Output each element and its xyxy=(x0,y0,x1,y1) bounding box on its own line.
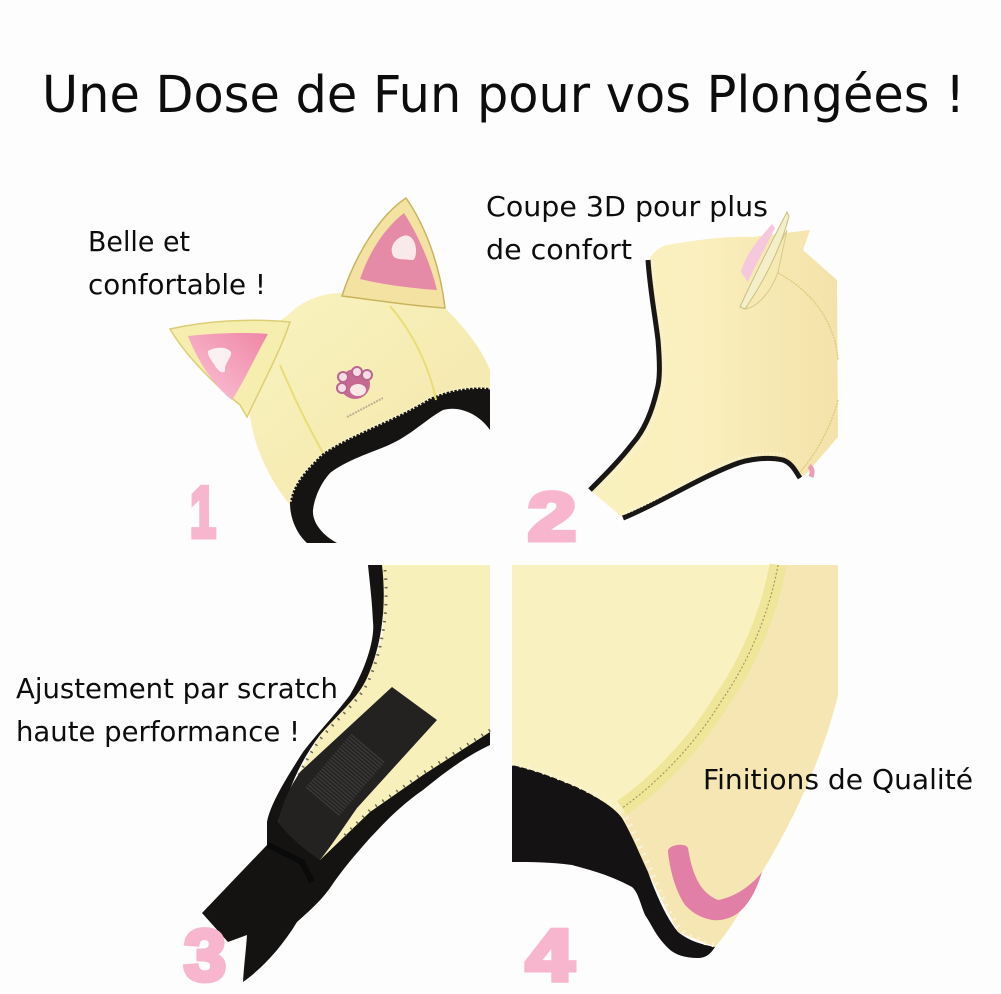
hood body xyxy=(590,230,838,518)
hood body xyxy=(247,293,490,505)
black bottom edge xyxy=(623,458,800,518)
strap fold shadow xyxy=(268,845,312,882)
pink inner ear xyxy=(741,224,775,282)
stitching xyxy=(290,570,490,840)
zigzag edge stitching xyxy=(290,387,490,503)
caption 1 xyxy=(88,225,266,301)
caption 1: Belle et xyxy=(88,225,190,258)
caption 3 xyxy=(16,672,338,748)
title: Une Dose de Fun pour vos Plongées ! xyxy=(42,66,965,125)
number 1: 1 xyxy=(190,473,216,553)
number 2: 2 xyxy=(528,479,576,555)
caption 1: confortable ! xyxy=(88,268,266,301)
black lining xyxy=(512,765,715,958)
ear flap behind xyxy=(744,230,787,309)
panel 1: front view of the hood with cat ears xyxy=(170,198,490,543)
left ear xyxy=(170,320,290,417)
caption 3: Ajustement par scratch xyxy=(16,672,338,705)
ear side view xyxy=(740,212,789,309)
caption 2: de confort xyxy=(486,233,632,266)
caption 2 xyxy=(486,190,768,266)
light fabric xyxy=(512,565,838,947)
number 4: 4 xyxy=(526,916,574,994)
paw logo xyxy=(337,367,383,417)
heart xyxy=(392,235,416,260)
black binding xyxy=(202,565,490,982)
black side edge xyxy=(590,260,659,490)
hood seams xyxy=(280,306,436,453)
seam band xyxy=(622,565,778,808)
panel 4: stitching finish close-up xyxy=(512,565,838,958)
caption 2: Coupe 3D pour plus xyxy=(486,190,768,223)
right ear xyxy=(342,198,445,308)
pink mark xyxy=(809,466,812,477)
seam stitch xyxy=(622,565,778,808)
number 3: 3 xyxy=(184,916,226,994)
heart xyxy=(208,348,231,372)
black inner lining xyxy=(290,387,490,543)
pink curve xyxy=(668,845,762,920)
strap ribbing xyxy=(322,748,368,802)
caption 4: Finitions de Qualité xyxy=(703,763,973,796)
caption 3: haute performance ! xyxy=(16,715,300,748)
velcro strap xyxy=(278,687,437,860)
panel 3: velcro strap close-up xyxy=(202,565,490,982)
hood fabric xyxy=(278,565,490,860)
seam xyxy=(778,273,838,472)
panel 2: side view of the hood xyxy=(590,212,838,518)
zigzag edge stitching xyxy=(512,763,715,945)
darker fabric past seam xyxy=(622,565,838,947)
zigzag edge stitching xyxy=(595,262,785,513)
